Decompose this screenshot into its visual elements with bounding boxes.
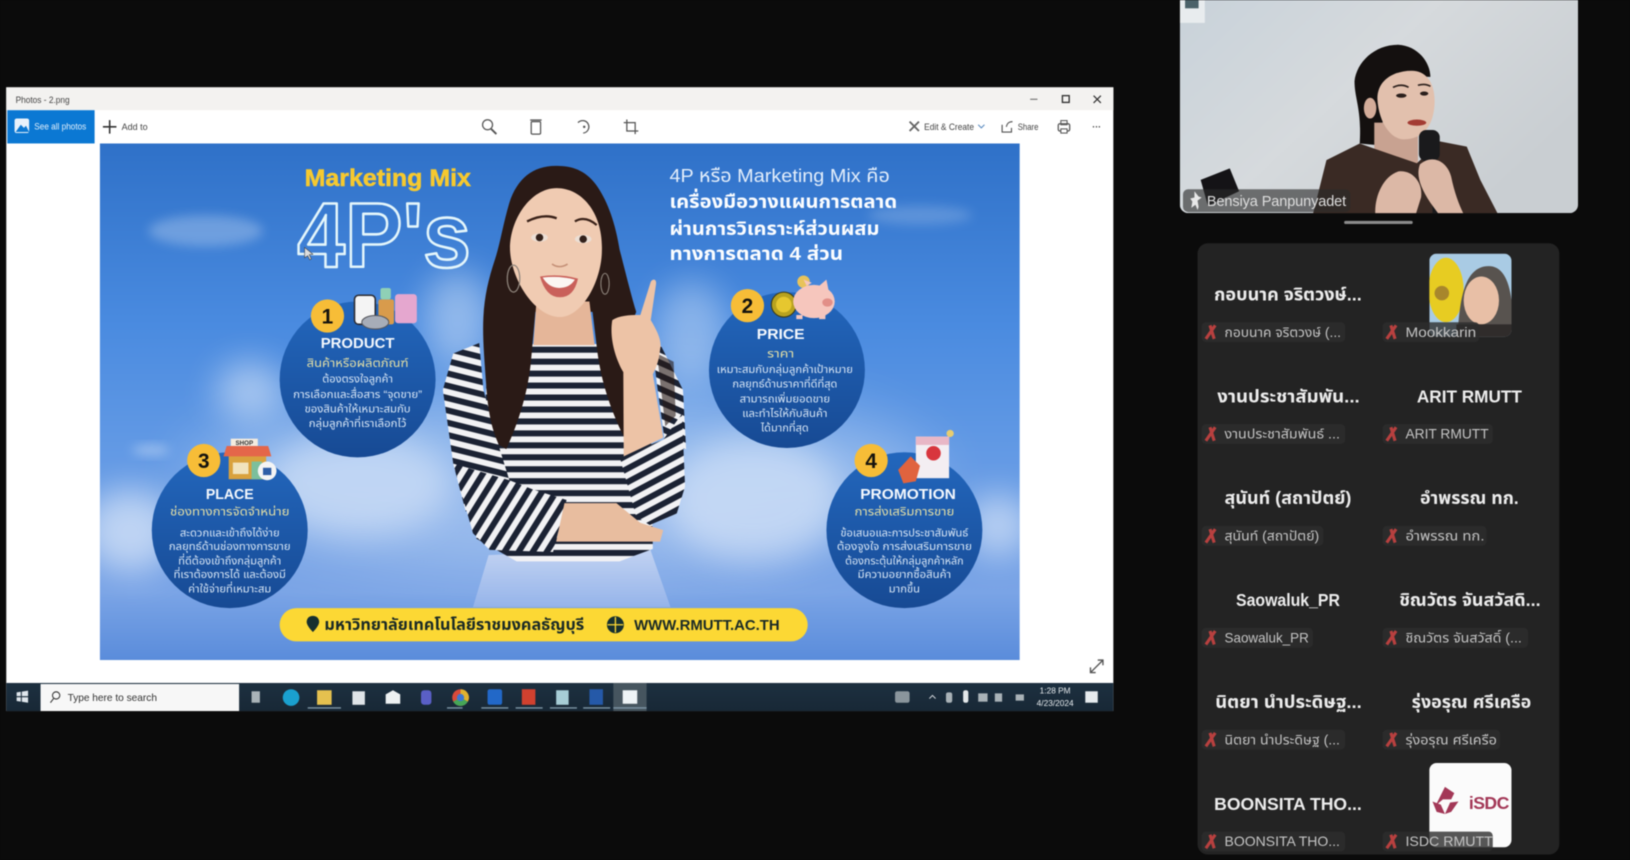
circle 4: promotion: ต้องจูงใจ การส่งเสริมการขาย <box>837 540 972 553</box>
infographic image <box>83 143 1031 660</box>
tile names: ชิณวัตร จันสวัสดิ... <box>1399 590 1541 610</box>
heading: Marketing Mix 4P's: Marketing Mix <box>305 165 472 192</box>
circle 3: place: ที่เราต้องการได้ และต้องมี <box>174 567 286 581</box>
expand icon <box>1090 660 1103 673</box>
tile names: กอบนาค จริตวงษ์... <box>1214 284 1362 304</box>
tile names: BOONSITA THO... <box>1214 794 1362 814</box>
speaker name tag: Bensiya Panpunyadet <box>1207 194 1346 210</box>
badge 4 <box>855 444 888 477</box>
title bar <box>6 87 1113 110</box>
definition text block <box>669 165 897 264</box>
circle 3: place: ที่ดีต้องเข้าถึงกลุ่มลูกค้า <box>178 553 281 567</box>
tile names: งานประชาสัมพัน... <box>1217 386 1360 406</box>
name tags with muted microphones: นิตยา นำประดิษฐ (... <box>1225 732 1340 747</box>
badge 3: 3 <box>198 450 210 473</box>
speaker figure <box>1313 45 1498 214</box>
toolbar <box>7 110 1101 143</box>
avatar: iSDC logo: iSDC <box>1469 793 1510 813</box>
face <box>510 188 602 317</box>
circle 4: promotion: ข้อเสนอและการประชาสัมพันธ์ <box>840 527 969 539</box>
ear <box>1364 98 1376 119</box>
facial features <box>1393 84 1430 126</box>
name tags with muted microphones: BOONSITA THO... <box>1225 834 1340 849</box>
raised forearm and pointing hand <box>611 280 663 456</box>
search box <box>41 684 239 711</box>
definition text block: ผ่านการวิเคราะห์ส่วนผสม <box>669 218 879 239</box>
circle 2: price: เหมาะสมกับกลุ่มลูกค้าเป้าหมาย <box>717 363 853 376</box>
circle 3: place: ช่องทางการจัดจำหน่าย <box>170 505 290 519</box>
system tray and clock <box>895 685 1098 708</box>
name tags with muted microphones: รุ่งอรุณ ศรีเครือ <box>1405 731 1497 748</box>
circle 2: price: ราคา <box>767 349 794 361</box>
footer pill: university and website <box>280 608 808 641</box>
avatar: iSDC logo <box>1429 763 1511 847</box>
toolbar: Add to <box>122 122 148 132</box>
speaker name tag <box>1183 189 1350 212</box>
circle 1: product: ของสินค้าให้เหมาะสมกับ <box>305 404 411 416</box>
circle 2: price: และทำไรให้กับสินค้า <box>742 408 827 420</box>
footer pill: university and website: WWW.RMUTT.AC.TH <box>634 618 780 634</box>
search box: Type here to search <box>68 693 157 704</box>
toolbar: ··· <box>1092 122 1101 132</box>
title bar: Photos - 2.png <box>16 95 70 105</box>
tile names: สุนันท์ (สถาปัตย์) <box>1225 488 1351 509</box>
left upper sleeve <box>443 343 509 511</box>
name tags with muted microphones: กอบนาค จริตวงษ์ (... <box>1225 325 1341 340</box>
circle 4: promotion: มากขึ้น <box>889 582 920 596</box>
badge 2: 2 <box>742 295 753 318</box>
heading: Marketing Mix 4P's <box>296 167 472 270</box>
icon: milk bottle, jars and fish <box>354 288 417 329</box>
badge 1 <box>311 299 344 333</box>
definition text block: ทางการตลาด 4 ส่วน <box>669 243 843 264</box>
black object on table <box>1201 168 1239 206</box>
circle 1: product: ต้องตรงใจลูกค้า <box>322 374 393 386</box>
badge 1: 1 <box>322 305 333 328</box>
left hand <box>1375 171 1421 214</box>
right upper sleeve <box>653 346 686 449</box>
circle 4: promotion: ต้องกระตุ้นให้กลุ่มลูกค้าหลัก <box>845 554 964 567</box>
definition text block: 4P หรือ Marketing Mix คือ <box>669 165 890 186</box>
system tray and clock: 4/23/2024 <box>1037 698 1074 708</box>
circle 2: price <box>709 275 865 448</box>
badge 3 <box>187 444 220 477</box>
tile names: รุ่งอรุณ ศรีเครือ <box>1412 692 1531 713</box>
system tray and clock: 1:28 PM <box>1040 685 1071 695</box>
hair over right sleeve <box>657 353 676 426</box>
circle 3: place: สะดวกและเข้าถึงได้ง่าย <box>180 526 280 539</box>
definition text block: เครื่องมือวางแผนการตลาด <box>669 188 897 212</box>
speaker video tile <box>1180 0 1578 214</box>
left forearm sleeve <box>453 464 567 552</box>
sky background <box>100 143 1020 660</box>
long hair <box>483 166 636 449</box>
tile names: Saowaluk_PR <box>1236 590 1340 610</box>
hair <box>1355 45 1430 146</box>
right forearm sleeve <box>620 414 685 525</box>
badge 2 <box>731 289 764 322</box>
toolbar: Edit & Create <box>924 122 974 132</box>
circle 2: price: ได้มากที่สุด <box>760 420 809 434</box>
pants <box>473 548 671 607</box>
name tags with muted microphones: ชิณวัตร จันสวัสดิ์ (... <box>1405 630 1522 645</box>
name tags with muted microphones: ISDC RMUTT <box>1405 834 1493 849</box>
icon: shop <box>224 439 277 480</box>
participants panel <box>1198 243 1559 854</box>
window frame <box>6 87 1113 711</box>
circle 4: promotion: PROMOTION <box>860 486 956 503</box>
circle 1: product: PRODUCT <box>321 335 395 352</box>
heading: Marketing Mix 4P's: 4P's <box>297 185 471 287</box>
name tags with muted microphones: ARIT RMUTT <box>1405 427 1489 442</box>
toolbar: Share <box>1018 122 1039 132</box>
dress <box>1313 141 1498 214</box>
woman pointing upward <box>443 166 686 607</box>
icon: globe <box>608 617 623 633</box>
circle 2: price: PRICE <box>757 326 805 343</box>
circle 4: promotion: การส่งเสริมการขาย <box>855 505 954 519</box>
wall <box>1180 0 1578 213</box>
facial features <box>507 216 609 297</box>
circle 3: place: PLACE <box>206 486 254 503</box>
name tags with muted microphones: สุนันท์ (สถาปัตย์) <box>1225 529 1319 545</box>
app icons <box>252 683 647 711</box>
icon: location pin <box>307 616 319 632</box>
face <box>1377 71 1435 139</box>
name tags with muted microphones: Mookkarin <box>1405 325 1476 340</box>
clouds <box>83 206 1031 572</box>
circle 4: promotion: มีความอยากซื้อสินค้า <box>858 567 951 581</box>
mouse cursor <box>305 247 313 260</box>
name tags with muted microphones: งานประชาสัมพันธ์ ... <box>1225 427 1340 442</box>
circle 3: place: กลยุทธ์ด้านช่องทางการขาย <box>169 540 291 553</box>
microphone <box>1419 130 1441 214</box>
circle 1: product: สินค้าหรือผลิตภัณฑ์ <box>307 356 409 370</box>
icon: shop: SHOP <box>235 440 253 447</box>
footer pill: university and website: มหาวิทยาลัยเทคโนโลยีราชมงคลธัญบุรี <box>324 617 584 634</box>
tile names: ARIT RMUTT <box>1417 386 1522 406</box>
neck <box>1374 123 1418 169</box>
windows taskbar <box>6 683 1113 711</box>
circle 4: promotion <box>826 430 982 608</box>
circle 1: product <box>280 288 436 457</box>
icon: coin and piggy bank <box>771 275 835 319</box>
circle 3: place <box>152 439 308 608</box>
neck <box>533 301 595 345</box>
circle 3: place: ค่าใช้จ่ายที่เหมาะสม <box>188 582 271 596</box>
name tags with muted microphones <box>1202 322 1528 851</box>
circle 1: product: กลุ่มลูกค้าที่เราเลือกไว้ <box>309 416 407 430</box>
toolbar: See all photos <box>34 121 87 131</box>
crossed forearm <box>556 503 663 542</box>
badge 4: 4 <box>865 450 877 473</box>
right hand <box>1418 159 1464 214</box>
tile names <box>1214 284 1541 814</box>
avatar: sunflower photo <box>1428 254 1514 337</box>
circle 1: product: การเลือกและสื่อสาร “จุดขาย” <box>293 387 422 401</box>
circle 2: price: กลยุทธ์ด้านราคาที่ดีที่สุด <box>732 377 837 391</box>
tile names: อำพรรณ ทก. <box>1420 488 1519 508</box>
name tags with muted microphones: Saowaluk_PR <box>1225 630 1309 645</box>
icon: promotion poster and tag <box>898 430 954 483</box>
icon: start <box>17 691 28 703</box>
name tags with muted microphones: อำพรรณ ทก. <box>1405 529 1484 544</box>
striped torso <box>476 344 653 561</box>
thermostat on wall <box>1180 0 1205 23</box>
tile names: นิตยา นำประดิษฐ... <box>1215 692 1362 712</box>
speaker drag handle <box>1344 221 1413 224</box>
circle 2: price: สามารถเพิ่มยอดขาย <box>740 392 830 405</box>
